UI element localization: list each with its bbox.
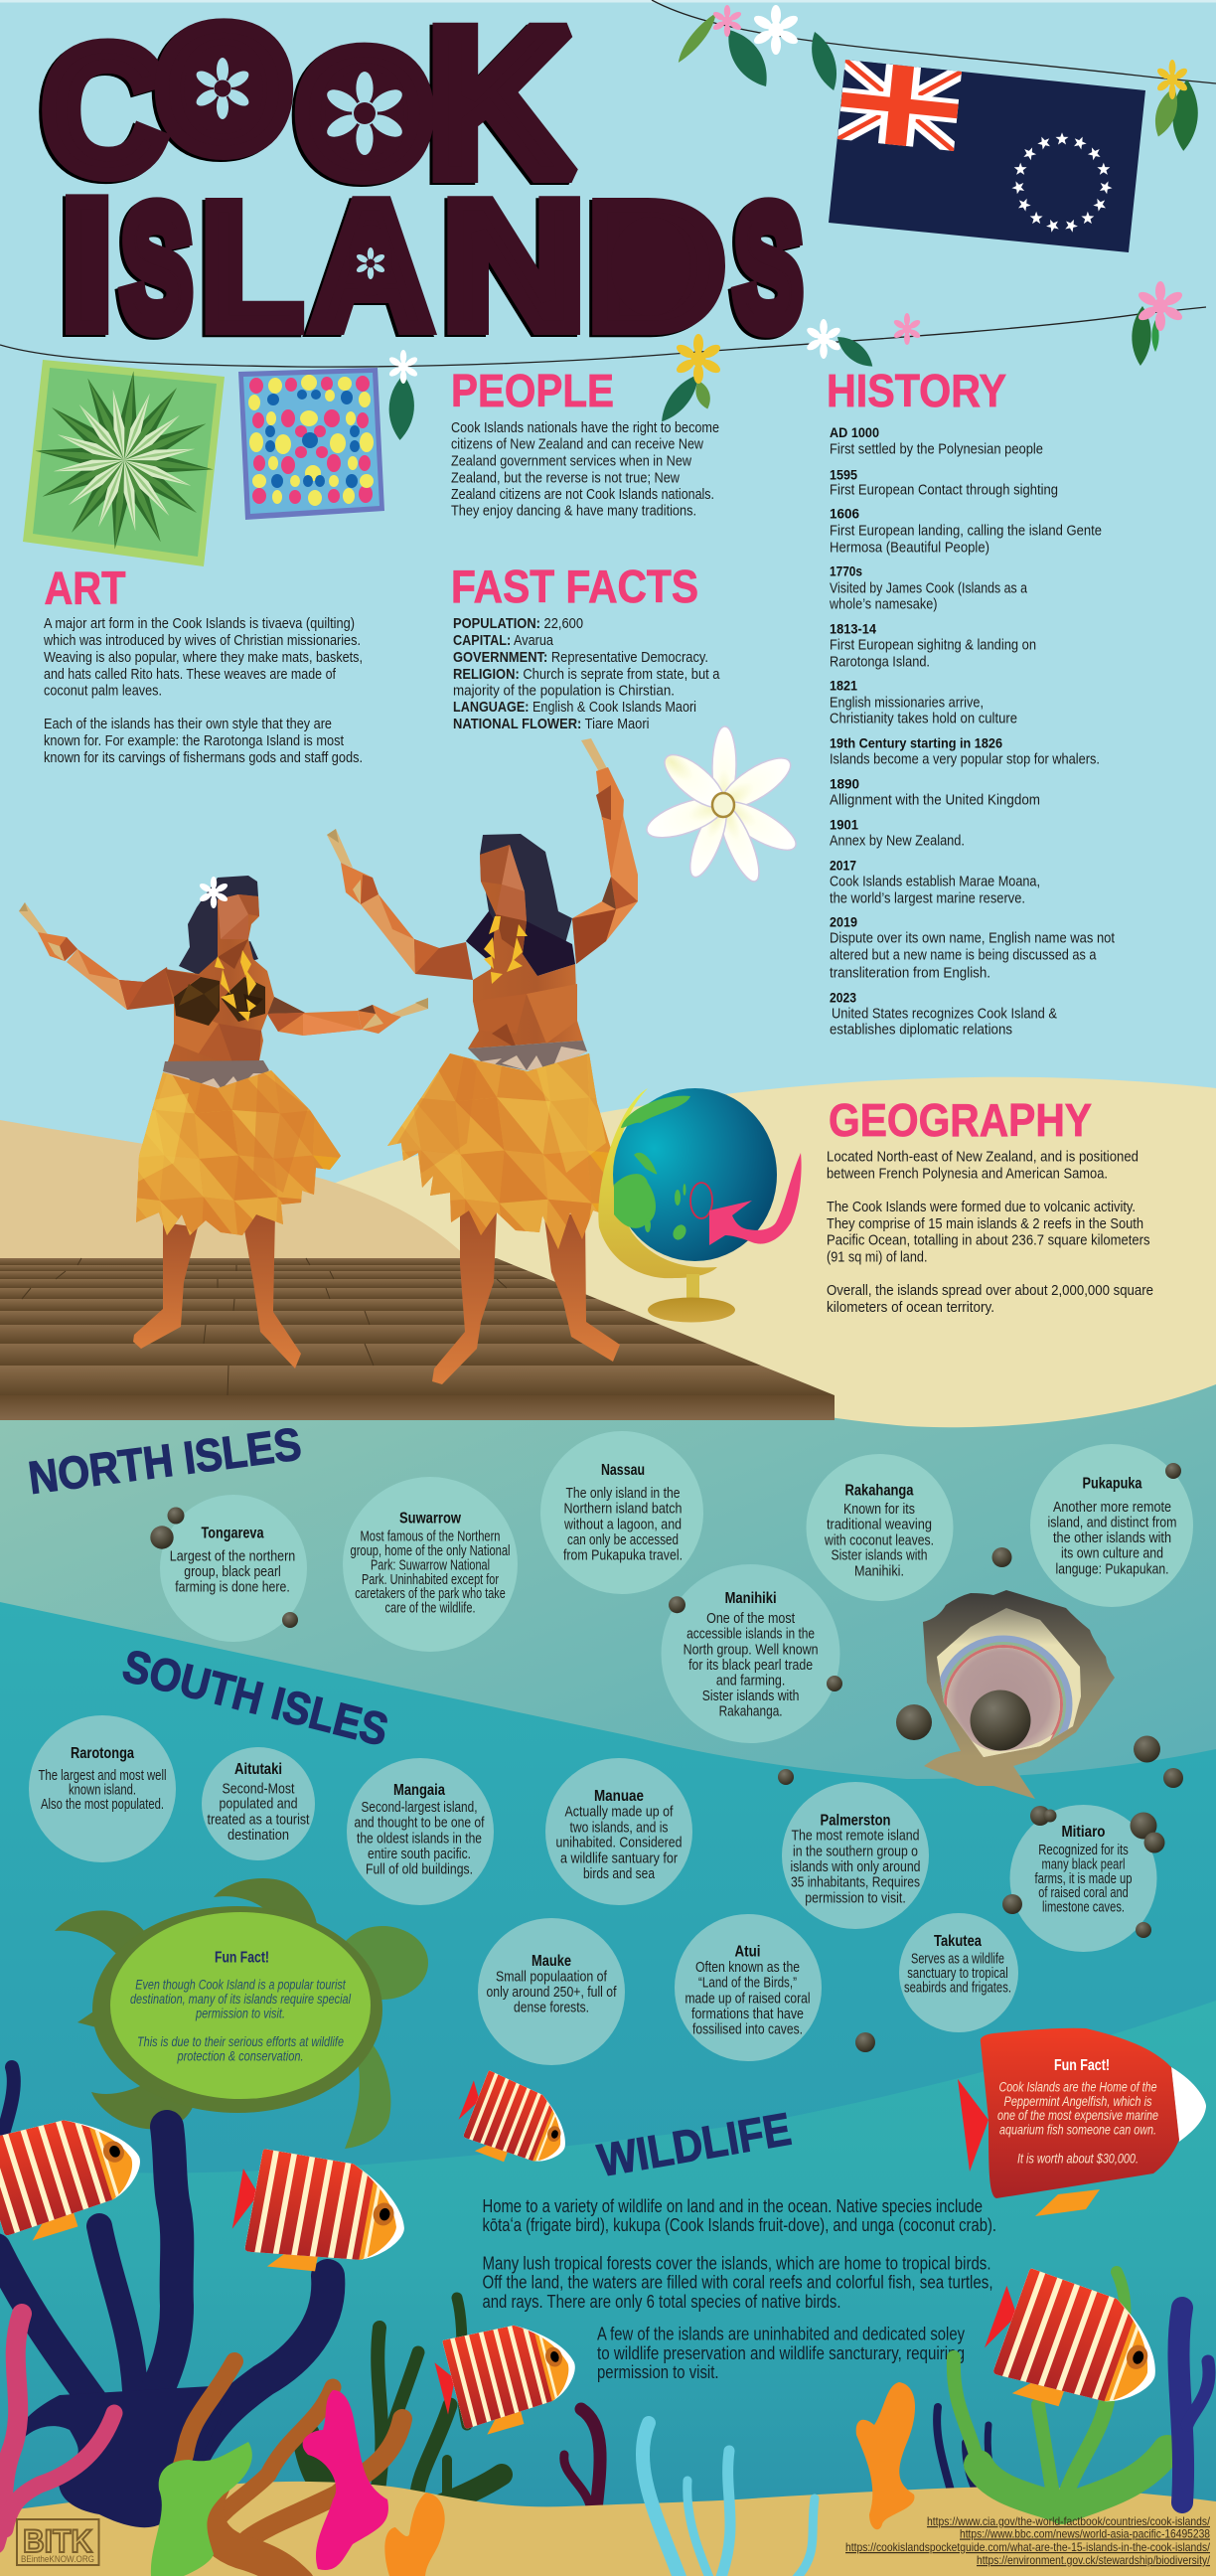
- fun fact: turtle text: Fun Fact!: [215, 1950, 269, 1966]
- fun fact: fish text: Fun Fact!: [1054, 2057, 1110, 2074]
- sources: [845, 2514, 1211, 2567]
- island: Nassau: The only island in the: [566, 1486, 680, 1502]
- island: Palmerston: permission to visit.: [805, 1890, 906, 1906]
- island: Mangaia: entire south pacific.: [368, 1847, 471, 1862]
- island: Atui: fossilised into caves.: [692, 2021, 803, 2037]
- text block: geography: Overall, the islands spread over about 2,000,000 square: [827, 1282, 1153, 1299]
- logo: BITK: BEintheKNOW.ORG: [21, 2554, 94, 2564]
- tan hill: [0, 1120, 472, 1272]
- coral: navy plant: [0, 2067, 328, 2527]
- text block: people: They enjoy dancing & have many traditions.: [451, 503, 696, 519]
- text block: wildlife: Off the land, the waters are filled with coral reefs and colorful fish, sea turtles,: [483, 2272, 993, 2292]
- island: Manuae: birds and sea: [583, 1866, 656, 1882]
- seaweed: dark green and maroon behind sand: [306, 2298, 996, 2509]
- title line 2: ISLANDS: [61, 162, 802, 367]
- text block: art: which was introduced by wives of Christian missionaries.: [43, 632, 361, 649]
- text block: people: Cook Islands nationals have the right to become: [451, 419, 719, 436]
- text block: geography: (91 sq mi) of land.: [827, 1248, 928, 1266]
- text block: history timeline: Annex by New Zealand.: [830, 833, 965, 849]
- red island locator circle: [690, 1183, 712, 1218]
- island: Atui: Often known as the: [695, 1960, 800, 1976]
- island: Rakahanga: Manihiki.: [854, 1564, 904, 1580]
- icon: flower in first O: [194, 58, 251, 119]
- island: Mitiaro: [1035, 1824, 1133, 1916]
- heading: people: PEOPLE: [451, 365, 614, 416]
- text block: history timeline: 19th Century starting in 1826: [830, 735, 1002, 751]
- arrow pointing to the islands: [709, 1153, 802, 1245]
- text block: art: Weaving is also popular, where they make mats, baskets,: [44, 649, 363, 666]
- title line 2: ISLANDS: S: [122, 172, 191, 362]
- fun fact: fish text: Cook Islands are the Home of the: [999, 2079, 1156, 2095]
- island: Manihiki: for its black pearl trade: [688, 1658, 813, 1674]
- text block: history timeline: Hermosa (Beautiful People): [830, 539, 989, 557]
- text block: history timeline: First settled by the Polynesian people: [830, 441, 1043, 457]
- text block: wildlife: [483, 2196, 996, 2382]
- island: Palmerston: 35 inhabitants, Requires: [791, 1874, 920, 1890]
- text block: history timeline: establishes diplomatic relations: [830, 1022, 1012, 1038]
- island: Manuae: Manuae: [594, 1788, 644, 1805]
- dancer: left: [19, 876, 428, 1368]
- text block: fast facts: POPULATION: 22,600: [453, 615, 583, 632]
- fun fact: turtle text: permission to visit.: [195, 2006, 285, 2021]
- text block: geography: between French Polynesia and American Samoa.: [827, 1165, 1108, 1183]
- left dancer arms: [19, 902, 428, 1036]
- fun fact: turtle text: Even though Cook Island is a popular tourist: [135, 1978, 347, 1992]
- text block: people: citizens of New Zealand and can receive New: [451, 435, 703, 453]
- text block: history timeline: Rarotonga Island.: [830, 654, 930, 670]
- island: Manihiki: One of the most: [706, 1611, 795, 1627]
- text block: art: known for. For example: the Rarotonga Island is most: [44, 732, 345, 749]
- globe stand: [598, 1088, 717, 1278]
- island: Manuae: a wildlife santuary for: [560, 1851, 678, 1866]
- text block: history timeline: altered but a new name is being discussed as a: [830, 946, 1097, 964]
- island: Palmerston: The most remote island: [791, 1829, 920, 1845]
- heading: history: HISTORY: [827, 365, 1006, 416]
- island: Suwarrow: caretakers of the park who take: [355, 1586, 506, 1602]
- island: Aitutaki: Second-Most: [223, 1781, 294, 1797]
- island: Manihiki: Rakahanga.: [719, 1703, 783, 1719]
- island: Manihiki: accessible islands in the: [686, 1626, 815, 1642]
- island: Rakahanga: [824, 1483, 934, 1580]
- island: Tongareva: farming is done here.: [175, 1580, 290, 1596]
- flag of the Cook Islands: [829, 60, 1145, 252]
- text block: geography: Pacific Ocean, totalling in about 236.7 square kilometers: [827, 1232, 1150, 1248]
- island: Takutea: seabirds and frigates.: [904, 1980, 1011, 1996]
- text block: history timeline: Visited by James Cook (Islands as a: [830, 580, 1028, 596]
- island: Mangaia: Full of old buildings.: [366, 1862, 473, 1878]
- island: Pukapuka: its own culture and: [1061, 1546, 1163, 1562]
- text block: fast facts: LANGUAGE: English & Cook Islands Maori: [453, 699, 696, 716]
- text block: history timeline: English missionaries arrive,: [830, 694, 984, 712]
- text block: people: Zealand, but the reverse is not true; New: [451, 469, 680, 487]
- coral: dark blue right: [1178, 2308, 1209, 2502]
- coral: light green: [151, 2442, 252, 2576]
- text block: history timeline: First European landing, calling the island Gente: [830, 523, 1102, 539]
- island: Mitiaro: Recognized for its: [1038, 1843, 1129, 1858]
- bottom rope: [0, 307, 1206, 367]
- title line 1: COOK: O: [294, 14, 434, 215]
- red fish fun fact: [958, 2028, 1206, 2216]
- island: Pukapuka: [1047, 1475, 1176, 1578]
- text block: history timeline: 1901: [830, 817, 858, 833]
- island: Tongareva: Tongareva: [201, 1525, 264, 1542]
- fun fact: turtle text: This is due to their serious efforts at wildlife: [137, 2034, 344, 2049]
- sky background: [0, 0, 1216, 1431]
- island: Nassau: from Pukapuka travel.: [563, 1548, 683, 1564]
- text block: history timeline: the world’s largest marine reserve.: [830, 890, 1025, 906]
- text block: wildlife: to wildlife preservation and wildlife sancturary, requiring: [597, 2343, 965, 2363]
- text block: geography: The Cook Islands were formed due to volcanic activity.: [827, 1199, 1136, 1215]
- island: Nassau: without a lagoon, and: [563, 1517, 682, 1532]
- island: Mangaia: and thought to be one of: [354, 1815, 485, 1831]
- text block: history timeline: whole’s namesake): [829, 596, 938, 612]
- text block: art: coconut palm leaves.: [44, 682, 162, 700]
- right dancer skirt: [387, 1053, 610, 1249]
- text block: wildlife: Home to a variety of wildlife on land and in the ocean. Native species include: [483, 2196, 983, 2216]
- island: Mitiaro: limestone caves.: [1042, 1900, 1125, 1916]
- island: Manuae: Actually made up of: [564, 1805, 674, 1821]
- text block: history timeline: United States recognizes Cook Island &: [832, 1006, 1057, 1022]
- sea turtle: [55, 1878, 428, 2149]
- title line 2: ISLANDS: S: [735, 172, 802, 363]
- island: Mangaia: Second-largest island,: [362, 1800, 477, 1816]
- coral: light blue: [643, 2423, 815, 2576]
- left dancer hair: [179, 876, 258, 976]
- island: Pukapuka: languge: Pukapukan.: [1055, 1562, 1168, 1578]
- title line 2: ISLANDS: A: [311, 165, 432, 367]
- icon: tiare flower: [642, 726, 802, 886]
- island circles: [29, 1431, 1193, 2065]
- text block: history timeline: [829, 424, 1116, 1038]
- island: Aitutaki: Aitutaki: [234, 1761, 282, 1778]
- text block: history timeline: 1890: [830, 775, 859, 791]
- island: Mangaia: the oldest islands in the: [357, 1831, 482, 1847]
- island: Manuae: [556, 1788, 682, 1882]
- island: Suwarrow: [350, 1511, 511, 1616]
- island: Atui: made up of raised coral: [685, 1992, 811, 2008]
- text block: people: Zealand government services when in New: [451, 453, 691, 469]
- text block: wildlife: Many lush tropical forests cover the islands, which are home to tropical birds.: [483, 2254, 991, 2274]
- fun fact: fish text: It is worth about $30,000.: [1017, 2151, 1139, 2167]
- text block: art: Each of the islands has their own style that they are: [44, 716, 332, 732]
- green star quilt: [23, 360, 225, 566]
- icon: flower in second O: [323, 72, 406, 155]
- island: Aitutaki: populated and: [219, 1797, 298, 1813]
- ocean background: north band: [0, 1371, 1216, 1829]
- text block: history timeline: 2019: [830, 914, 857, 930]
- heading: geography: GEOGRAPHY: [829, 1094, 1092, 1146]
- island: Rakahanga: Rakahanga: [844, 1483, 914, 1499]
- right dancer torso: [468, 845, 583, 1048]
- island: Mangaia: Mangaia: [393, 1782, 445, 1799]
- heading: fast facts: FAST FACTS: [451, 561, 698, 612]
- right dancer necklace: [484, 916, 528, 984]
- island: Aitutaki: [207, 1761, 310, 1844]
- island: Rarotonga: Also the most populated.: [41, 1797, 164, 1813]
- blue blob quilt: [238, 368, 384, 520]
- text block: history timeline: Allignment with the United Kingdom: [830, 791, 1040, 809]
- fun fact: turtle text: [130, 1950, 352, 2063]
- title line 2: ISLANDS: L: [201, 166, 303, 366]
- island: Suwarrow: group, home of the only National: [350, 1543, 511, 1559]
- title line 2: ISLANDS: N: [442, 164, 585, 367]
- island: Suwarrow: Suwarrow: [399, 1511, 461, 1527]
- right dancer arms: [327, 738, 638, 980]
- right dancer hair: [466, 834, 575, 976]
- coral: orange left: [384, 2493, 445, 2576]
- top rope: [652, 0, 1216, 83]
- text block: people: Zealand citizens are not Cook Islands nationals.: [451, 486, 714, 503]
- right dancer legs: [432, 1209, 620, 1384]
- island: Pukapuka: Pukapuka: [1083, 1475, 1142, 1493]
- text block: history timeline: 1595: [830, 467, 857, 483]
- island: Tongareva: Largest of the northern: [170, 1548, 295, 1564]
- island: Tongareva: [170, 1525, 295, 1596]
- text block: history timeline: 2017: [830, 857, 856, 873]
- text block: fast facts: CAPITAL: Avarua: [453, 632, 554, 649]
- striped fish: small top: [451, 2064, 583, 2187]
- dancer: right: [327, 738, 638, 1384]
- island: Takutea: Serves as a wildlife: [911, 1952, 1004, 1968]
- icon: flower in A: [356, 247, 385, 279]
- garland: bottom flowers and leaves: [387, 281, 1184, 441]
- island: Mauke: Mauke: [532, 1953, 571, 1970]
- text block: art: known for its carvings of fishermans gods and staff gods.: [44, 749, 363, 766]
- island: Mauke: Small populaation of: [496, 1970, 608, 1986]
- island: Atui: [685, 1944, 811, 2037]
- coral: pink branch: [0, 2314, 114, 2544]
- globe land: [614, 1096, 690, 1242]
- text block: wildlife: permission to visit.: [597, 2362, 719, 2382]
- text block: history timeline: transliteration from English.: [830, 964, 990, 982]
- title: [42, 0, 802, 367]
- heading: art: ART: [44, 563, 125, 614]
- island: Rakahanga: traditional weaving: [827, 1517, 932, 1532]
- island: Suwarrow: care of the wildlife.: [385, 1600, 475, 1616]
- island: Tongareva: group, black pearl: [184, 1564, 281, 1580]
- island: Manuae: two islands, and is: [570, 1821, 668, 1837]
- black pearls: [150, 1463, 1183, 2052]
- island: Aitutaki: treated as a tourist: [207, 1813, 310, 1829]
- text block: people: [451, 419, 719, 519]
- fun fact: turtle text: destination, many of its islands require special: [130, 1992, 352, 2007]
- island: Manihiki: [684, 1590, 819, 1719]
- right dancer belt: [468, 1041, 587, 1070]
- text block: geography: Located North-east of New Zealand, and is positioned: [827, 1149, 1139, 1165]
- fun fact: fish text: Peppermint Angelfish, which is: [1003, 2094, 1152, 2109]
- island: Rarotonga: Rarotonga: [71, 1745, 134, 1762]
- icon: hair flower: [199, 877, 228, 908]
- text block: wildlife: A few of the islands are uninhabited and dedicated soley: [597, 2324, 965, 2343]
- island: Rakahanga: Known for its: [843, 1502, 915, 1518]
- text block: history timeline: First European sighitng & landing on: [830, 636, 1036, 654]
- island: Rarotonga: [38, 1745, 167, 1813]
- fun fact: fish text: [997, 2057, 1158, 2167]
- island: Manihiki: Manihiki: [725, 1590, 777, 1607]
- island: Palmerston: Palmerston: [821, 1813, 890, 1829]
- text block: history timeline: 1606: [830, 505, 859, 521]
- logo: BITK: BITK: [23, 2523, 92, 2559]
- text block: history timeline: 1813-14: [830, 620, 876, 636]
- island: Nassau: Northern island batch: [564, 1501, 682, 1517]
- island: Palmerston: [791, 1813, 920, 1906]
- island: Pukapuka: the other islands with: [1053, 1530, 1171, 1546]
- island: Manihiki: Sister islands with: [702, 1689, 799, 1704]
- text block: geography: [827, 1149, 1153, 1316]
- text block: history timeline: 1821: [830, 678, 857, 694]
- island: Atui: Atui: [735, 1944, 761, 1960]
- island: Mitiaro: of raised coral and: [1038, 1885, 1129, 1901]
- garland: top flowers and leaves: [672, 5, 1200, 152]
- island: Manihiki: and farming.: [716, 1674, 785, 1690]
- fun fact: turtle text: protection & conservation.: [177, 2049, 304, 2063]
- text block: history timeline: AD 1000: [830, 424, 879, 440]
- island: Mauke: only around 250+, full of: [487, 1985, 617, 2001]
- island: Pukapuka: island, and distinct from: [1047, 1515, 1176, 1530]
- text block: history timeline: Islands become a very popular stop for whalers.: [830, 751, 1100, 767]
- coral: magenta: [303, 2390, 388, 2570]
- oyster shell: [923, 1590, 1115, 1799]
- title line 2: ISLANDS: D: [587, 166, 725, 367]
- island: Mauke: [487, 1953, 617, 2015]
- island: Takutea: sanctuary to tropical: [907, 1966, 1008, 1982]
- text block: history timeline: First European Contact through sighting: [830, 481, 1058, 499]
- title line 1: COOK: [42, 0, 573, 219]
- island: Rakahanga: with coconut leaves.: [824, 1532, 934, 1548]
- island: Nassau: [563, 1462, 683, 1564]
- text block: wildlife: kōtaʻa (frigate bird), kukupa (Cook Islands fruit-dove), and unga (coconut crab).: [483, 2215, 996, 2235]
- text block: art: A major art form in the Cook Islands is tivaeva (quilting): [44, 615, 355, 632]
- island: Rarotonga: known island.: [69, 1783, 136, 1799]
- island: Aitutaki: destination: [228, 1828, 289, 1844]
- cream hill: [298, 1077, 1216, 1427]
- text block: art: [43, 615, 363, 766]
- striped fish: second: [227, 2144, 421, 2289]
- island: Mitiaro: Mitiaro: [1061, 1824, 1106, 1841]
- ocean background: south band: [0, 1602, 1216, 2576]
- heading: south isles: SOUTH ISLES: [118, 1639, 393, 1756]
- title line 1: COOK: C: [42, 8, 167, 212]
- heading: wildlife: WILDLIFE: [594, 2103, 795, 2186]
- island: Rarotonga: The largest and most well: [38, 1768, 167, 1784]
- ocean background: wildlife band: [0, 2001, 1216, 2576]
- icon: union jack: [837, 60, 962, 151]
- text block: geography: kilometers of ocean territory.: [827, 1299, 994, 1316]
- island: Takutea: [904, 1933, 1011, 1996]
- coral: brown branch: [179, 2361, 402, 2576]
- island: Suwarrow: Most famous of the Northern: [360, 1529, 501, 1544]
- text block: geography: They comprise of 15 main islands & 2 reefs in the South: [827, 1215, 1143, 1232]
- left dancer legs: [133, 1212, 301, 1368]
- text block: wildlife: and rays. There are only 6 total species of native birds.: [483, 2292, 840, 2312]
- island: Palmerston: islands with only around: [791, 1859, 920, 1875]
- text block: history timeline: 1770s: [830, 563, 862, 578]
- left dancer belt: [163, 1060, 269, 1089]
- heading: north isles: NORTH ISLES: [26, 1417, 304, 1504]
- left dancer torso: [165, 894, 274, 1070]
- text block: history timeline: Christianity takes hold on culture: [830, 710, 1017, 727]
- island: Palmerston: in the southern group o: [793, 1845, 918, 1860]
- text block: fast facts: [453, 615, 720, 732]
- text block: history timeline: Dispute over its own name, English name was not: [830, 930, 1116, 946]
- title line 2: ISLANDS: I: [61, 162, 113, 367]
- island: Mangaia: [354, 1782, 485, 1878]
- island: Pukapuka: Another more remote: [1053, 1500, 1171, 1516]
- island: Nassau: Nassau: [601, 1462, 645, 1479]
- text block: fast facts: majority of the population is Chirstian.: [453, 682, 675, 700]
- striped fish: center: [429, 2313, 593, 2441]
- fun fact: fish text: aquarium fish someone can own.: [999, 2123, 1156, 2137]
- text block: fast facts: GOVERNMENT: Representative Democracy.: [453, 649, 708, 666]
- island: Mitiaro: many black pearl: [1041, 1856, 1125, 1872]
- island: Suwarrow: Park. Uninhabited except for: [362, 1572, 499, 1588]
- icon: ring of stars: [1011, 132, 1113, 234]
- striped fish: right: [974, 2260, 1182, 2439]
- text block: fast facts: NATIONAL FLOWER: Tiare Maori: [453, 716, 650, 732]
- island: Nassau: can only be accessed: [567, 1532, 679, 1548]
- island: Rakahanga: Sister islands with: [831, 1548, 928, 1564]
- coral: orange right: [856, 2382, 915, 2529]
- fun fact: fish text: one of the most expensive marine: [997, 2108, 1158, 2123]
- sand sea floor: [0, 2482, 1216, 2576]
- island: Atui: “Land of the Birds,”: [698, 1976, 797, 1992]
- island: Manuae: unihabited. Considered: [556, 1835, 682, 1851]
- island: Mitiaro: farms, it is made up: [1035, 1871, 1133, 1887]
- text block: art: and hats called Rito hats. These weaves are made of: [44, 666, 337, 683]
- island: Manihiki: North group. Well known: [684, 1642, 819, 1658]
- left dancer necklace: [215, 950, 256, 1022]
- coral: green right: [954, 2272, 1167, 2509]
- wooden dock: [0, 1258, 835, 1420]
- text block: history timeline: Cook Islands establish Marae Moana,: [830, 873, 1040, 890]
- island: Atui: formations that have: [691, 2007, 804, 2022]
- island: Takutea: Takutea: [934, 1933, 982, 1950]
- striped fish: left: [0, 2102, 163, 2250]
- text block: fast facts: RELIGION: Church is seprate from state, but a: [453, 666, 720, 683]
- left dancer skirt: [136, 1070, 341, 1235]
- text block: history timeline: 2023: [830, 990, 856, 1006]
- globe sphere: [613, 1088, 777, 1261]
- left dancer bikini: [174, 977, 265, 1026]
- globe: [598, 1088, 802, 1322]
- island: Mauke: dense forests.: [514, 2000, 589, 2015]
- island: Suwarrow: Park: Suwarrow National: [371, 1558, 490, 1574]
